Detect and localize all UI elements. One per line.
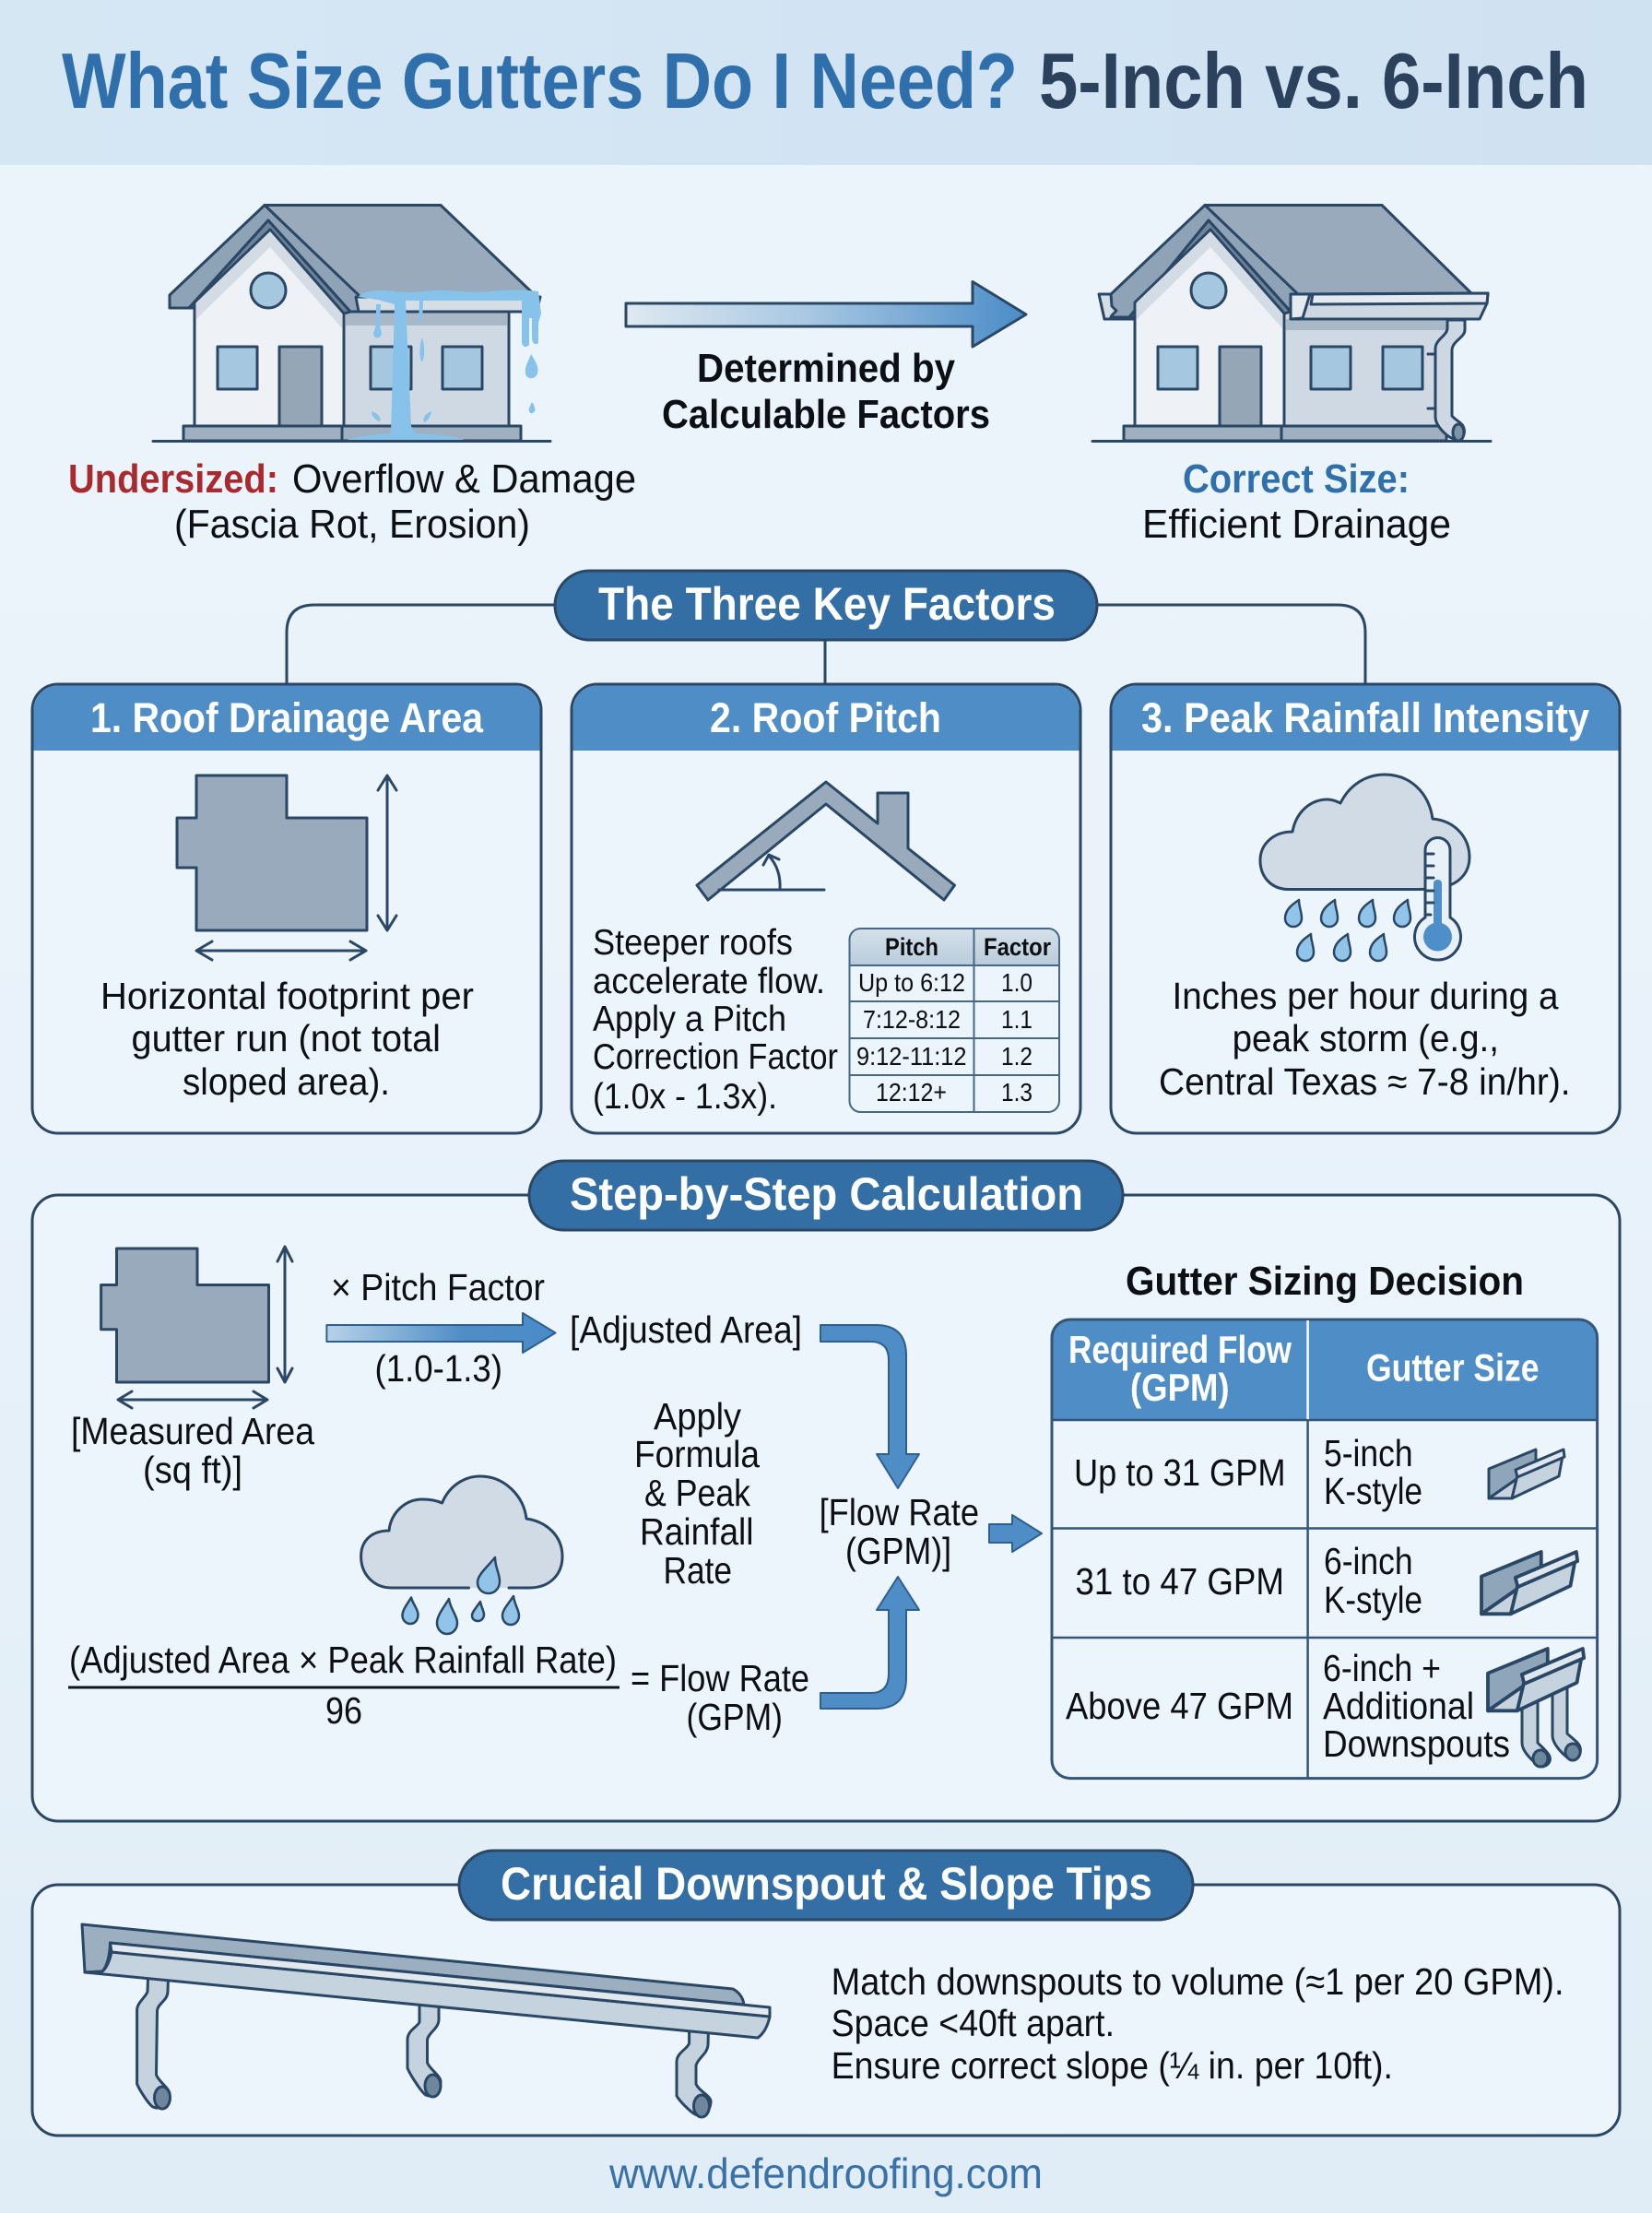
table: gutter sizing decision: Gutter Size <box>1366 1346 1540 1390</box>
label: undersized: (Fascia Rot, Erosion) <box>174 502 530 547</box>
label: undersized <box>68 456 636 547</box>
icon: undersized house with overflow <box>153 205 550 441</box>
formula: 96 <box>325 1689 362 1732</box>
panel heading: 2. Roof Pitch <box>710 694 941 741</box>
table: gutter sizing decision: Required Flow <box>1068 1328 1292 1371</box>
table: pitch correction factors: Pitch <box>885 933 938 961</box>
label: apply formula: & Peak <box>644 1472 750 1514</box>
description <box>1159 975 1571 1103</box>
heading pill: crucial tips: Crucial Downspout & Slope Tips <box>501 1858 1152 1910</box>
downspout two <box>407 2001 441 2097</box>
label: measured area: [Measured Area <box>71 1410 314 1452</box>
label: flow rate <box>820 1491 979 1572</box>
table: gutter sizing decision: 31 to 47 GPM <box>1075 1560 1284 1603</box>
table: pitch correction factors <box>850 929 1059 1112</box>
table: gutter sizing decision: 6-inch <box>1324 1540 1413 1582</box>
label: apply formula <box>634 1395 760 1592</box>
label: measured area: (sq ft)] <box>143 1449 242 1491</box>
heading pill: the three key factors <box>555 571 1097 640</box>
description: (1.0x - 1.3x). <box>593 1077 777 1117</box>
icon: 6-inch gutter with downspouts <box>1488 1649 1584 1767</box>
label: apply formula: Formula <box>634 1433 760 1475</box>
formula: = Flow Rate <box>631 1657 809 1699</box>
arrow: adjusted area to flow rate <box>820 1325 919 1488</box>
arrow: determined by factors <box>626 282 1026 347</box>
arrow: to adjusted area <box>326 1313 555 1353</box>
description: accelerate flow. <box>593 962 825 1001</box>
description <box>593 923 838 1117</box>
heading pill: step-by-step calculation <box>529 1161 1123 1230</box>
heading pill: step-by-step calculation: Step-by-Step Calculation <box>570 1168 1083 1220</box>
panel: roof drainage area <box>32 684 541 1133</box>
table: gutter sizing decision: K-style <box>1324 1470 1422 1512</box>
icon: 6-inch gutter <box>1481 1552 1577 1614</box>
formula <box>68 1639 809 1738</box>
text: determined by calculable factors <box>662 346 990 437</box>
heading pill: the three key factors: The Three Key Factors <box>598 578 1056 630</box>
table: gutter sizing decision: 6-inch + <box>1323 1647 1441 1689</box>
downspout on house <box>1428 320 1465 441</box>
footer url: www.defendroofing.com <box>608 2149 1043 2197</box>
water overflow <box>348 290 541 440</box>
table: pitch correction factors: Factor <box>984 933 1051 961</box>
panel: crucial downspout and slope tips <box>32 1851 1620 2136</box>
label: apply formula: Rainfall <box>640 1510 754 1553</box>
title: question: What Size Gutters Do I Need? <box>62 38 1018 125</box>
downspout one <box>137 1973 170 2109</box>
label: apply formula: Rate <box>664 1549 732 1592</box>
description: Correction Factor <box>593 1037 838 1077</box>
heading pill: crucial tips <box>459 1851 1193 1920</box>
table: pitch correction factors: 9:12-11:12 <box>856 1042 966 1071</box>
table: gutter sizing decision: Up to 31 GPM <box>1074 1451 1286 1494</box>
icon: footprint with dimensions <box>177 775 396 960</box>
label: flow rate: [Flow Rate <box>820 1491 979 1533</box>
label: correct size: Correct Size: <box>1183 456 1410 502</box>
tips text: Match downspouts to volume (≈1 per 20 GPM). <box>832 1960 1564 2003</box>
icon: 5-inch gutter <box>1489 1450 1564 1498</box>
panel heading: 3. Peak Rainfall Intensity <box>1141 694 1589 741</box>
formula: (GPM) <box>686 1696 783 1738</box>
label: undersized: Undersized: <box>68 456 278 502</box>
label: pitch factor multiplier: × Pitch Factor <box>331 1266 545 1308</box>
icon: roof pitch angle <box>697 782 955 900</box>
table: gutter sizing decision: (GPM) <box>1130 1366 1230 1409</box>
connector lines from key factors <box>287 605 1365 683</box>
table: gutter sizing decision: Downspouts <box>1323 1722 1510 1765</box>
label: pitch factor multiplier <box>331 1266 545 1390</box>
table: gutter sizing decision: K-style <box>1324 1579 1422 1621</box>
label: adjusted area: [Adjusted Area] <box>570 1308 802 1351</box>
label: pitch factor multiplier: (1.0-1.3) <box>374 1347 502 1390</box>
table: pitch correction factors: 1.1 <box>1001 1005 1032 1034</box>
icon: correct house with gutter <box>1092 205 1491 441</box>
panel: step-by-step calculation <box>32 1161 1620 1821</box>
text: determined by calculable factors: Calculable Factors <box>662 392 990 437</box>
description: sloped area). <box>183 1060 390 1103</box>
panel: roof pitch <box>572 684 1080 1133</box>
icon: sloped gutter with downspouts <box>82 1924 770 2117</box>
table: gutter sizing decision: 5-inch <box>1324 1432 1413 1474</box>
label: undersized: Overflow & Damage <box>292 456 636 502</box>
table: gutter sizing decision: Additional <box>1323 1685 1474 1727</box>
arrow: flow rate to decision table <box>989 1515 1042 1552</box>
label: measured area <box>71 1410 314 1491</box>
table: gutter sizing decision <box>1052 1320 1598 1779</box>
table: gutter sizing decision: Above 47 GPM <box>1066 1685 1293 1727</box>
table: pitch correction factors: 1.2 <box>1001 1042 1032 1071</box>
panel heading: 1. Roof Drainage Area <box>90 694 484 741</box>
tips text: Ensure correct slope (¼ in. per 10ft). <box>832 2044 1393 2087</box>
table: pitch correction factors: 12:12+ <box>876 1078 947 1106</box>
description: Steeper roofs <box>593 923 793 963</box>
label: correct size: Efficient Drainage <box>1142 502 1451 547</box>
formula: (Adjusted Area × Peak Rainfall Rate) <box>69 1639 617 1681</box>
table: pitch correction factors: 7:12-8:12 <box>863 1005 961 1034</box>
label: correct size <box>1142 456 1451 547</box>
table: pitch correction factors: 1.3 <box>1001 1078 1032 1106</box>
arrow: formula to flow rate <box>820 1577 919 1709</box>
label: flow rate: (GPM)] <box>845 1530 951 1572</box>
tips text <box>832 1960 1564 2087</box>
description: Inches per hour during a <box>1173 975 1559 1017</box>
description: gutter run (not total <box>131 1017 441 1059</box>
description: Central Texas ≈ 7-8 in/hr). <box>1159 1060 1571 1103</box>
downspout three <box>677 2029 711 2117</box>
title: comparison: 5-Inch vs. 6-Inch <box>1039 38 1588 125</box>
description: peak storm (e.g., <box>1233 1017 1499 1059</box>
description <box>100 975 474 1103</box>
tips text: Space <40ft apart. <box>832 2002 1115 2044</box>
table: pitch correction factors: 1.0 <box>1001 968 1032 997</box>
text: determined by calculable factors: Determined by <box>697 346 955 391</box>
panel: peak rainfall intensity <box>1111 684 1620 1133</box>
icon: rain cloud <box>361 1476 562 1634</box>
icon: rain cloud and thermometer <box>1260 775 1469 961</box>
icon: measured area footprint <box>101 1247 292 1408</box>
label: apply formula: Apply <box>654 1395 741 1438</box>
description: Horizontal footprint per <box>100 975 474 1017</box>
table: pitch correction factors: Up to 6:12 <box>858 968 965 997</box>
header band <box>0 0 1652 165</box>
description: Apply a Pitch <box>593 1000 786 1039</box>
heading: gutter sizing decision: Gutter Sizing Decision <box>1126 1259 1524 1304</box>
